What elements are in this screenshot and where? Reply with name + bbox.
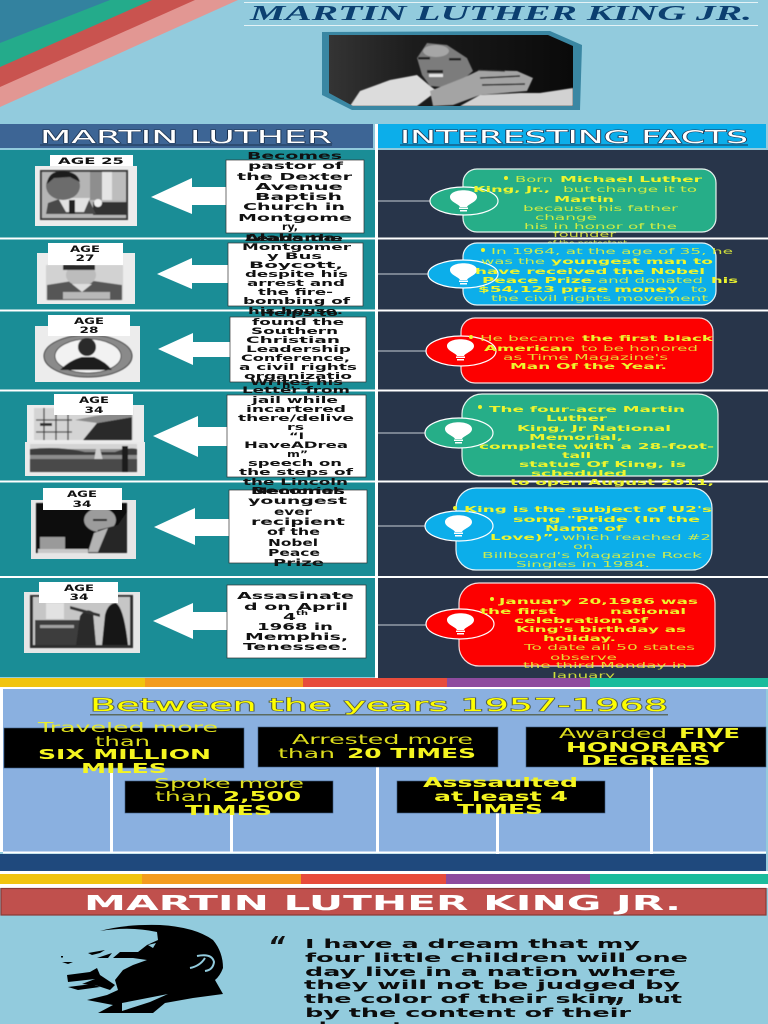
fact card 2: nobel prize: $54,123 prize money	[478, 285, 680, 294]
stat box: arrests: 20 TIMES	[347, 747, 476, 762]
fact card 2: nobel prize: In 1964, at the age of 35, he	[491, 247, 733, 256]
text block: leadership conference: Christian	[246, 336, 340, 346]
banner: Martin Luther King Jr.: MARTIN LUTHER KING JR.	[84, 891, 681, 915]
text block: letter and speech: incartered	[246, 405, 346, 415]
fact card 4: national memorial: The four-acre Martin	[489, 405, 686, 414]
row 4: age 34	[25, 394, 366, 477]
fact card 3: time magazine: as Time Magazine's	[503, 353, 668, 362]
quote text: they will not be judged by	[304, 977, 680, 992]
rainbow band upper	[0, 678, 768, 689]
text block: nobel recipient: ever	[274, 507, 313, 518]
text block: letter and speech: HaveADrea	[244, 441, 348, 451]
fact card 5: U2 song: King is the subject of U2's	[464, 505, 713, 514]
text block: leadership conference: Leadership	[246, 345, 352, 355]
text block: bus boycott: arrest and	[247, 279, 345, 289]
text block: bus boycott: bombing of	[243, 297, 350, 307]
row 3: age 28	[35, 315, 366, 382]
fact card 2: nobel prize	[378, 243, 738, 305]
fact card 5: U2 song: which reached #2	[562, 533, 711, 542]
text block: letter and speech: the steps of	[239, 468, 353, 478]
row 2: age 27	[37, 243, 363, 306]
text block: pastor: Baptish	[255, 192, 342, 203]
fact card 6: national holiday: observe	[550, 653, 617, 662]
fact card 4: national memorial: to open August 2011,	[510, 478, 714, 487]
text block: letter and speech: there/delive	[238, 414, 354, 424]
row 1: age 25: AGE 25	[58, 157, 124, 167]
text block: letter and speech: m”	[287, 450, 308, 460]
text block: nobel recipient	[248, 486, 348, 569]
stat box: assaults: TIMES	[457, 803, 543, 818]
quote text: four little children will one	[305, 950, 688, 965]
text block: bus boycott	[242, 234, 352, 317]
text block: letter and speech: Memorial.	[251, 487, 345, 497]
text block: bus boycott: Boycott,	[249, 261, 343, 271]
text block: letter and speech: “I	[289, 432, 304, 442]
fact card 3: time magazine	[378, 318, 714, 383]
text block: nobel recipient: Becomes	[251, 486, 346, 497]
section header: Interesting Facts: INTERESTING FACTS	[400, 127, 748, 148]
section header: Martin Luther	[0, 124, 373, 148]
fact card 5: U2 song: Singles in 1984.	[516, 560, 650, 569]
fact card 1: birth name: but change it to	[563, 185, 697, 194]
text block: leadership conference: Conference,	[241, 354, 350, 364]
fact card 6: national holiday	[378, 583, 715, 680]
fact card 4: national memorial: Luther	[546, 414, 607, 423]
stat box: honorary degrees: Awarded	[559, 727, 667, 742]
text block: letter and speech: Writes his	[250, 378, 343, 388]
title: MARTIN LUTHER KING JR.	[248, 1, 752, 25]
stat box: miles traveled: MILES	[81, 762, 167, 777]
portrait photo	[322, 31, 582, 110]
fact card 3: time magazine: Man Of the Year.	[510, 362, 667, 371]
text block: assassination	[237, 591, 354, 653]
rainbow band lower	[0, 871, 768, 888]
decorative corner stripes	[0, 0, 238, 107]
text block: leadership conference: Helps to	[260, 309, 338, 319]
text block: pastor: Becomes	[247, 151, 343, 162]
text block: letter and speech	[238, 378, 354, 497]
row 2: age 27: AGE	[70, 245, 100, 255]
text block: letter and speech: jail while	[250, 396, 338, 406]
text block: pastor: Church in	[243, 202, 345, 213]
text block: pastor: Alabama.	[245, 233, 343, 244]
row 5: age 34	[31, 488, 367, 563]
stat box: speeches: 2,500	[223, 790, 301, 805]
stat box: assaults	[397, 776, 605, 818]
stat box: arrests: Arrested more	[292, 733, 473, 748]
text block: leadership conference: n.	[282, 381, 295, 391]
fact card 4: national memorial: King, Jr National	[517, 424, 672, 433]
text block: pastor: the Dexter	[237, 172, 353, 183]
banner: Martin Luther King Jr.	[1, 888, 766, 915]
stat box: speeches	[125, 777, 333, 819]
row 3: age 28: 28	[80, 326, 99, 336]
text block: bus boycott: his house.	[248, 307, 343, 317]
stat box: honorary degrees: FIVE	[679, 727, 740, 742]
fact card 1: birth name: founder	[553, 230, 617, 239]
stat box: assaults: Asssaulted	[423, 776, 578, 791]
text block: letter and speech: rs	[287, 423, 304, 433]
fact card 3: time magazine: American	[484, 344, 574, 353]
text block: assassination: th	[296, 610, 308, 617]
fact card 6: national holiday: the first	[480, 607, 556, 616]
fact card 5: U2 song: Love)”,	[490, 533, 560, 542]
icon: silhouette of King	[61, 925, 223, 1013]
text block: pastor: Montgome	[238, 213, 352, 224]
fact card 1: birth name: King, Jr.,	[473, 185, 550, 194]
fact card 3: time magazine: He became	[480, 334, 575, 343]
fact card 2: nobel prize: the civil rights movement	[491, 294, 708, 303]
text block: assassination: 4	[283, 612, 297, 623]
stat box: miles traveled	[4, 721, 244, 777]
stat box: miles traveled: SIX MILLION	[38, 748, 211, 763]
text block: pastor	[237, 151, 353, 244]
fact card 4: national memorial: Memorial,	[529, 433, 623, 442]
fact card 5: U2 song: Billboard's Magazine Rock	[482, 551, 703, 560]
fact card 1: birth name	[378, 169, 716, 248]
stat box: speeches: Spoke more	[154, 777, 304, 792]
text block: assassination: d on April	[244, 602, 348, 613]
fact card 4: national memorial: tall	[562, 451, 591, 460]
text block: nobel recipient: of the	[267, 527, 320, 538]
fact card 1: birth name: his in honor of the	[524, 222, 677, 231]
fact card 1: birth name: of the protestant	[547, 239, 627, 248]
fact card 2: nobel prize: to	[691, 285, 707, 294]
text block: assassination: Tenessee.	[243, 642, 348, 653]
fact card 1: birth name: Martin	[554, 195, 615, 204]
text block: leadership conference: found the	[252, 318, 344, 328]
heading: between the years: Between the years 1957-1968	[90, 695, 668, 716]
fact card 3: time magazine: to be honored	[581, 344, 698, 353]
fact card 1: birth name: because his father	[523, 204, 679, 213]
row 2: age 27: 27	[76, 254, 95, 264]
row 4: age 34: 34	[84, 406, 104, 416]
row 3: age 28: AGE	[74, 317, 104, 327]
text block: leadership conference	[239, 309, 357, 391]
timeline background panels	[0, 124, 768, 678]
stat box: honorary degrees: DEGREES	[581, 754, 711, 769]
fact card 6: national holiday: the third Monday in	[523, 661, 687, 670]
fact card 6: national holiday: national	[610, 607, 687, 616]
text block: leadership conference: organizatio	[244, 372, 352, 382]
fact card 2: nobel prize: his	[711, 276, 738, 285]
fact card 6: national holiday: King's birthday as	[516, 625, 686, 634]
text block: nobel recipient: Peace	[268, 548, 320, 559]
text block: nobel recipient: Nobel	[268, 538, 318, 549]
text block: nobel recipient: Prize	[273, 558, 324, 569]
quote text: “	[268, 932, 285, 962]
section header: Martin Luther: MARTIN LUTHER	[40, 127, 332, 148]
fact card 5: U2 song: song "Pride (In the	[513, 515, 701, 524]
text block: bus boycott: the fire-	[258, 288, 333, 298]
fact card 4: national memorial	[378, 394, 718, 487]
stat box: miles traveled: than	[95, 735, 150, 750]
fact card 4: national memorial: complete with a 28-foot-	[479, 442, 714, 451]
text block: letter and speech: speech on	[248, 459, 342, 469]
fact card 4: national memorial: scheduled	[531, 469, 628, 478]
text block: bus boycott: y Bus	[267, 252, 322, 262]
quote text: by the content of their	[305, 1005, 633, 1020]
text block: pastor: Avenue	[255, 182, 343, 193]
stat box: arrests	[258, 727, 498, 767]
quote text: but	[637, 991, 682, 1006]
fact card 2: nobel prize: and donated	[598, 276, 703, 285]
stat box: miles traveled: Traveled more	[36, 721, 218, 736]
text block: bus boycott: Leads the	[245, 234, 343, 244]
text block: letter and speech: the Lincoln	[243, 478, 348, 488]
text block: assassination: Memphis,	[245, 632, 348, 643]
row 1: age 25	[35, 155, 364, 233]
quote text	[268, 932, 688, 1024]
fact card 1: birth name: change	[535, 213, 597, 222]
fact card 5: U2 song: on	[573, 542, 593, 551]
text block: pastor: ry,	[282, 222, 298, 233]
fact card 1: birth name: Michael Luther	[560, 175, 702, 184]
text block: bus boycott: Montgomer	[242, 243, 352, 253]
fact card 2: nobel prize: was the	[481, 257, 545, 266]
row 6: age 34: 34	[70, 593, 89, 603]
row 5: age 34: AGE	[67, 490, 97, 500]
fact card 4: national memorial: statue Of King, is	[519, 460, 686, 469]
fact card 2: nobel prize: have received the Nobel	[475, 267, 706, 276]
text block: leadership conference: Southern	[251, 327, 338, 337]
fact card 5: U2 song	[378, 488, 713, 570]
fact card 1: birth name: Born	[515, 175, 553, 184]
section header: Interesting Facts	[378, 124, 766, 148]
text block: assassination: Assasinate	[237, 591, 354, 602]
stat box: speeches: than	[155, 790, 212, 805]
text block: nobel recipient: youngest	[248, 496, 348, 507]
quote text: day live in a nation where	[305, 964, 676, 979]
stat box: honorary degrees	[526, 727, 766, 769]
stat box: assaults: at least 4	[434, 790, 568, 805]
stat box: honorary degrees: HONORARY	[566, 741, 726, 756]
fact card 6: national holiday: To date all 50 states	[522, 643, 695, 652]
fact card 2: nobel prize: Peace Prize	[482, 276, 593, 285]
quote text: ”	[607, 993, 624, 1023]
stat box: speeches: TIMES	[185, 804, 272, 819]
text block: pastor: pastor of	[248, 161, 345, 172]
text block: nobel recipient: recipient	[251, 517, 346, 528]
quote text: I have a dream that my	[305, 936, 640, 951]
text block: letter and speech: Letter from	[242, 386, 350, 396]
text block: assassination: 1968 in	[257, 622, 333, 633]
fact card 6: national holiday: January	[550, 671, 616, 680]
fact card 6: national holiday: holiday.	[543, 634, 616, 643]
row 6: age 34: AGE	[64, 584, 94, 594]
fact card 6: national holiday: January 20,1986 was	[497, 597, 698, 606]
panel: statistics 1957-1968	[0, 687, 766, 871]
row 6: age 34	[24, 582, 366, 658]
row 5: age 34: 34	[72, 500, 92, 510]
stat box: arrests: than	[278, 747, 335, 762]
fact card 5: U2 song: Name of	[545, 524, 624, 533]
fact card 2: nobel prize: youngest man to	[551, 257, 714, 266]
fact card 6: national holiday: celebration of	[514, 616, 649, 625]
row 4: age 34: AGE	[79, 396, 109, 406]
quote text: the color of their skin,	[304, 991, 624, 1006]
text block: bus boycott: despite his	[245, 270, 348, 280]
text block: leadership conference: a civil rights	[239, 363, 357, 373]
fact card 3: time magazine: the first black	[582, 334, 714, 343]
